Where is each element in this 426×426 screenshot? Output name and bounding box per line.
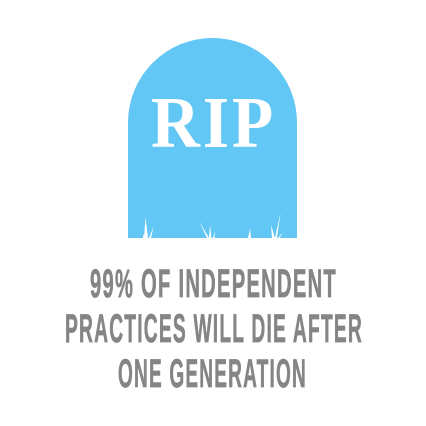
tombstone body bbox=[128, 38, 297, 238]
icon: grass tufts bbox=[143, 213, 283, 238]
tombstone inscription: RIP: RIP bbox=[151, 82, 276, 163]
headline bbox=[65, 262, 363, 396]
icon: tombstone bbox=[128, 38, 297, 238]
